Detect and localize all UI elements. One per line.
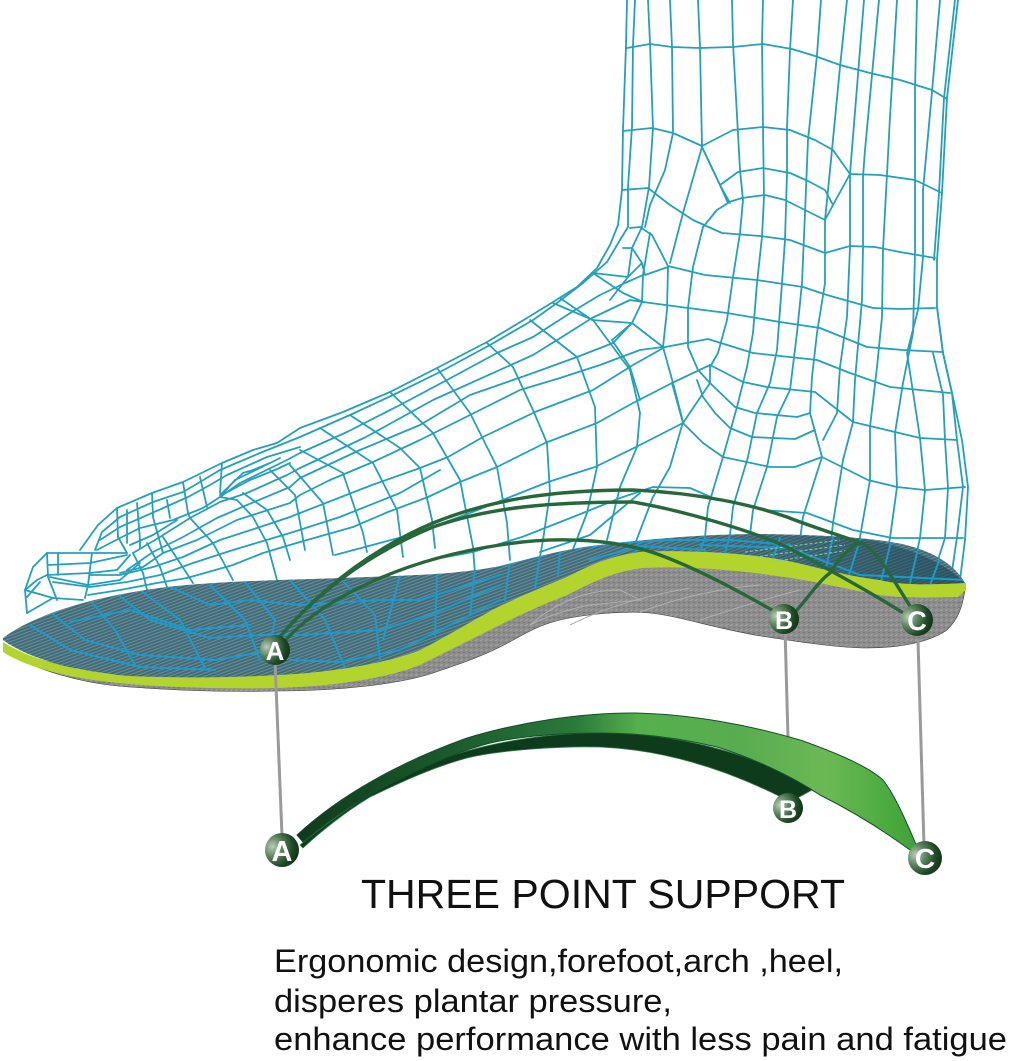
connector C [918,640,924,846]
badge: B on insole [769,604,799,635]
foot wireframe mesh [25,0,968,613]
mesh: toes [25,428,440,613]
insole top surface [3,534,965,677]
connector A [275,660,282,836]
description text: disperes plantar pressure, [274,983,672,1019]
description text: enhance performance with less pain and fatigue [274,1021,1007,1057]
title: THREE POINT SUPPORT [361,871,845,917]
badge: A on shell: A [272,836,293,868]
yellow foam layer [3,551,966,688]
badge: B on insole: B [775,607,793,635]
connector B [785,628,788,738]
arc B to apex [797,543,862,610]
mesh: leg rings [622,44,965,490]
arc A to B [283,540,772,643]
badge: A on insole [260,635,290,666]
arc A to C inner [277,502,905,640]
badge: B on shell: B [779,796,797,824]
green arch support shell [297,713,917,850]
mesh: dorsum cross lines [270,227,942,575]
green support arcs on foot [277,490,910,643]
mesh: leg verticals [610,0,968,585]
shell dark underside [300,733,812,848]
connector lines [275,628,924,846]
badge: A on shell [265,833,299,868]
blue mesh on insole [30,535,965,670]
badge: C on shell: C [915,843,935,874]
insole [3,534,966,691]
arc A to C outer [277,490,910,640]
underside contour lines [530,585,800,625]
badge: C on shell [908,841,942,875]
badge: C on insole: C [907,606,927,636]
insole underside [3,555,965,691]
description text [274,943,1007,1057]
badge: A on insole: A [266,636,285,666]
mesh: top edge and dorsum [300,0,963,560]
badge: B on shell [773,793,803,824]
pale stitching on heel [745,540,850,562]
description text: Ergonomic design,forefoot,arch ,heel, [274,943,843,979]
shell bright top face [297,713,917,850]
badge: C on insole [901,604,933,636]
heel shading [650,535,965,584]
